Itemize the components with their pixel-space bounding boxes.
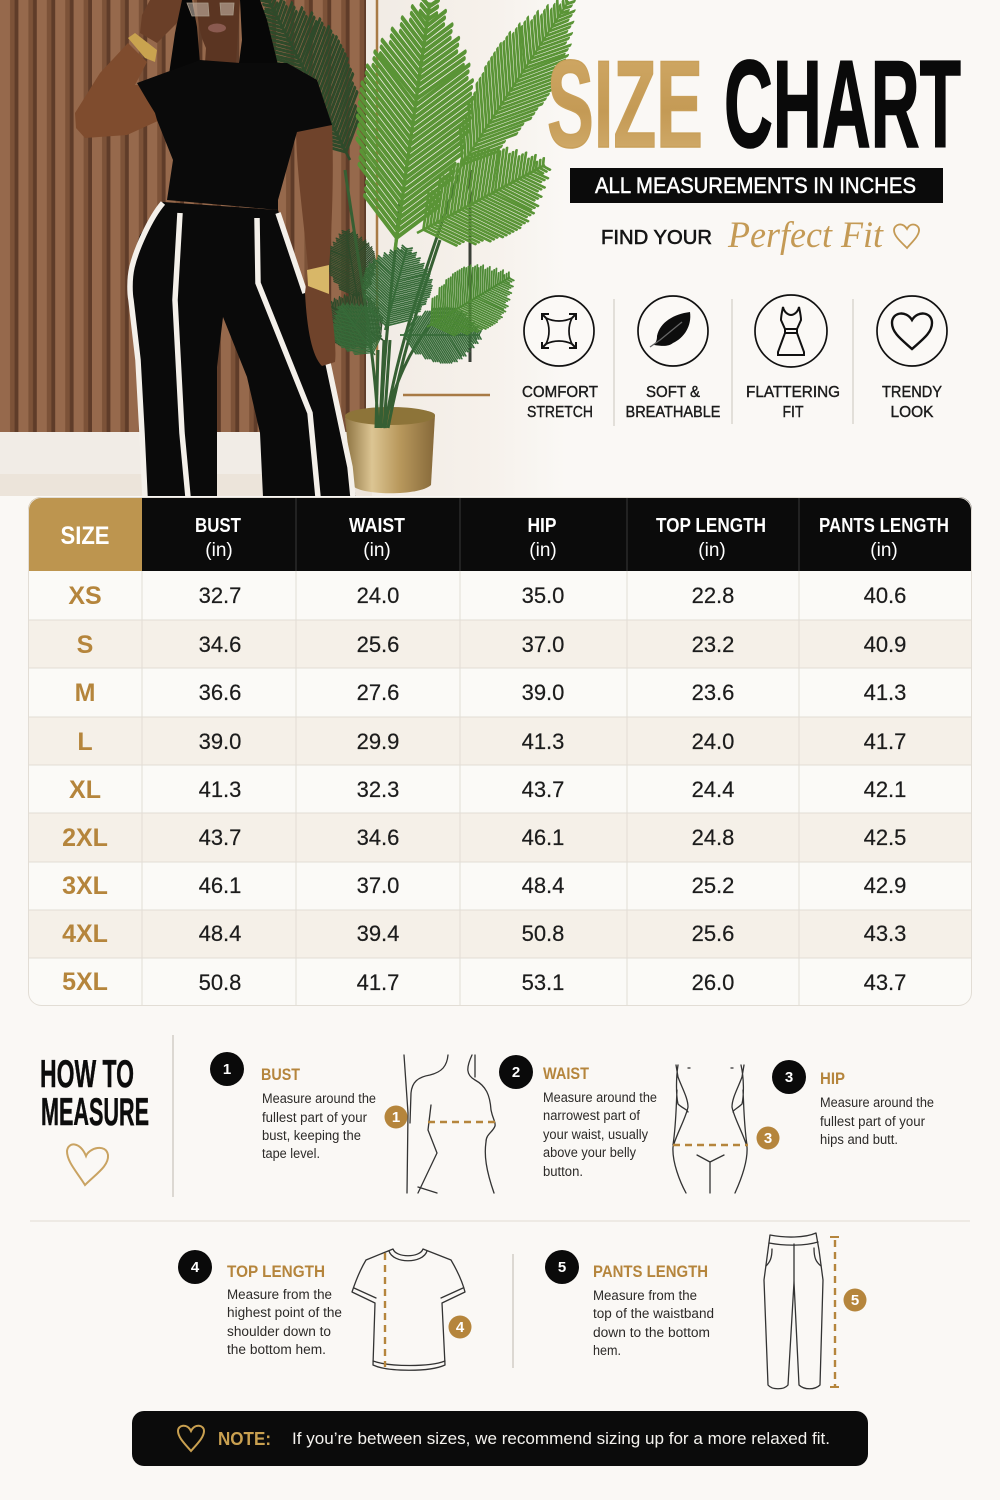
row: M: 27.6 <box>357 680 399 705</box>
dark window strip <box>468 170 472 362</box>
row: L: 41.7 <box>864 729 906 754</box>
row: 5XL: 50.8 <box>199 970 241 995</box>
row: S <box>77 635 906 653</box>
row: 5XL <box>62 972 906 990</box>
row: 3XL <box>62 876 906 894</box>
row: 2XL: 2XL <box>62 824 108 852</box>
step 1: bust <box>210 1052 495 1193</box>
row: M <box>76 684 906 701</box>
step 2: waist: Measure around the <box>543 1090 657 1105</box>
row: 4XL: 48.4 <box>199 921 241 946</box>
step 1: bust: fullest part of your <box>262 1110 367 1125</box>
icon: feather <box>638 296 708 366</box>
step 3: hip: fullest part of your <box>820 1114 925 1129</box>
row: 2XL: 24.8 <box>692 825 734 850</box>
row: 4XL: 4XL <box>62 920 108 948</box>
feature: trendy look <box>877 296 947 421</box>
bright wall and window <box>366 0 502 496</box>
table header: TOP LENGTH <box>656 515 766 537</box>
row: L: 24.0 <box>692 729 734 754</box>
row: 2XL: 43.7 <box>199 825 241 850</box>
table header: HIP <box>528 515 556 537</box>
diagram: t-shirt: 4 <box>456 1319 465 1336</box>
feature: flattering fit: FIT <box>782 404 804 421</box>
row: L <box>79 732 906 750</box>
step 1: bust: BUST <box>261 1065 301 1084</box>
row: 3XL: 46.1 <box>199 873 241 898</box>
banner: all measurements <box>570 168 943 203</box>
table header: BUST <box>195 515 241 537</box>
feature: trendy look: LOOK <box>890 404 934 421</box>
table header: (in) <box>205 540 233 561</box>
pot rim <box>345 407 435 425</box>
hair <box>170 0 278 71</box>
lower floor band <box>0 474 372 496</box>
row: 5XL: 26.0 <box>692 970 734 995</box>
step 4: top length: shoulder down to <box>227 1324 331 1339</box>
row: M: 41.3 <box>864 680 906 705</box>
neck and face <box>197 0 240 63</box>
black shirt <box>137 60 332 210</box>
row: M: 39.0 <box>522 680 564 705</box>
hero photo: model and plant <box>0 0 599 497</box>
step 1: bust: Measure around the <box>262 1091 376 1106</box>
step 1: bust: bust, keeping the <box>262 1128 361 1143</box>
mirror frame <box>377 0 490 395</box>
row: 3XL: 42.9 <box>864 873 906 898</box>
icon: small heart <box>894 224 919 248</box>
how to measure heading: HOW TO <box>40 1053 134 1096</box>
row: S: 23.2 <box>692 632 734 657</box>
step 1: bust: tape level. <box>262 1146 320 1161</box>
table header: PANTS LENGTH <box>819 515 949 537</box>
lips <box>208 24 226 32</box>
tagline: find your perfect fit: Perfect Fit <box>727 215 885 256</box>
table header: (in) <box>870 540 898 561</box>
step 5: pants length: Measure from the <box>593 1288 697 1303</box>
step 2: waist <box>499 1055 780 1193</box>
row: XS: 40.6 <box>864 583 906 608</box>
step 4: top length: the bottom hem. <box>227 1342 326 1357</box>
row: 2XL: 42.5 <box>864 825 906 850</box>
row: 4XL: 50.8 <box>522 921 564 946</box>
diagram: t-shirt <box>352 1249 472 1370</box>
row: 3XL: 37.0 <box>357 873 399 898</box>
number badge 1: 1 <box>223 1061 231 1078</box>
row: XS: XS <box>68 582 102 610</box>
row: S: 25.6 <box>357 632 399 657</box>
size header cell: SIZE <box>60 522 110 550</box>
feature: flattering fit: FLATTERING <box>746 384 840 401</box>
row: L: L <box>77 728 93 756</box>
row: 5XL: 53.1 <box>522 970 564 995</box>
step 4: top length: highest point of the <box>227 1305 342 1320</box>
step 5: pants length <box>545 1233 866 1389</box>
hand at glasses <box>140 0 186 43</box>
row: L: 39.0 <box>199 729 241 754</box>
row: 5XL: 5XL <box>62 968 108 996</box>
feature: comfort stretch: COMFORT <box>522 384 598 401</box>
number badge 3 <box>772 1060 806 1094</box>
gold cuff <box>307 265 329 294</box>
back dark fronds <box>260 0 384 349</box>
diagram: trousers <box>764 1233 866 1389</box>
raised arm <box>75 43 160 138</box>
row: XL: 43.7 <box>522 777 564 802</box>
row: XS: 24.0 <box>357 583 399 608</box>
floor <box>0 432 347 474</box>
row: M: M <box>75 679 95 707</box>
step 2: waist: your waist, usually <box>543 1127 648 1142</box>
black pants <box>128 202 356 497</box>
size header cell <box>28 497 142 571</box>
diagram: trousers: 5 <box>851 1292 859 1309</box>
note bar: NOTE: <box>218 1429 271 1449</box>
lower mid fronds <box>332 244 482 364</box>
feature icons row <box>522 295 947 421</box>
table header: (in) <box>363 540 391 561</box>
row: 2XL <box>63 828 906 846</box>
number badge 2 <box>499 1055 533 1089</box>
row: 4XL: 43.3 <box>864 921 906 946</box>
size table <box>28 497 972 1006</box>
number badge 4 <box>178 1250 212 1284</box>
step 5: pants length: top of the waistband <box>593 1306 714 1321</box>
table header: WAIST <box>349 515 405 537</box>
number badge 5 <box>545 1250 579 1284</box>
row: XS: 22.8 <box>692 583 734 608</box>
right arm <box>296 125 335 366</box>
note bar: If you’re between sizes, we recommend sizing up for a more relaxed fit. <box>292 1429 830 1448</box>
row: 3XL: 48.4 <box>522 873 564 898</box>
step 3: hip <box>772 1060 934 1147</box>
feature: trendy look: TRENDY <box>882 384 942 401</box>
row: XS: 32.7 <box>199 583 241 608</box>
row: XL: 32.3 <box>357 777 399 802</box>
striped rows <box>28 620 972 958</box>
step 5: pants length: down to the bottom <box>593 1325 710 1340</box>
step 5: pants length: hem. <box>593 1343 621 1358</box>
row: 2XL: 46.1 <box>522 825 564 850</box>
step 3: hip: hips and butt. <box>820 1132 898 1147</box>
row: 4XL <box>62 924 906 942</box>
icon: stretch arrows <box>524 296 594 366</box>
icon: heart <box>877 296 947 366</box>
row: S: 37.0 <box>522 632 564 657</box>
row: 3XL: 3XL <box>62 872 108 900</box>
row: 3XL: 25.2 <box>692 873 734 898</box>
row: XL: 42.1 <box>864 777 906 802</box>
row: 5XL: 43.7 <box>864 970 906 995</box>
row: 2XL: 34.6 <box>357 825 399 850</box>
row: 5XL: 41.7 <box>357 970 399 995</box>
row: XS: 35.0 <box>522 583 564 608</box>
title: SIZE CHART <box>547 36 961 174</box>
bright fronds <box>356 0 576 250</box>
how to measure heading: MEASURE <box>41 1091 149 1134</box>
feature: soft and breathable: SOFT & <box>646 384 700 401</box>
row: 4XL: 39.4 <box>357 921 399 946</box>
table body background <box>28 497 972 1006</box>
gold bracelet <box>128 33 157 62</box>
note bar <box>132 1411 868 1466</box>
step 3: hip: HIP <box>820 1069 845 1088</box>
tagline: find your perfect fit <box>601 215 919 256</box>
feature: soft and breathable: BREATHABLE <box>626 404 720 421</box>
step 2: waist: WAIST <box>543 1064 590 1083</box>
row: S: S <box>77 631 93 659</box>
row: XL: 41.3 <box>199 777 241 802</box>
diagram: bust side view <box>384 1055 495 1193</box>
tagline: find your perfect fit: FIND YOUR <box>601 227 712 249</box>
row: XL <box>69 780 906 798</box>
row: S: 40.9 <box>864 632 906 657</box>
row: M: 36.6 <box>199 680 241 705</box>
step 4: top length <box>178 1249 472 1370</box>
banner: all measurements: ALL MEASUREMENTS IN INCHES <box>595 173 916 198</box>
number badge 2: 2 <box>512 1064 520 1081</box>
diagram: torso front view <box>673 1065 780 1193</box>
row: XL: 24.4 <box>692 777 734 802</box>
table header <box>28 497 972 571</box>
icon: dress <box>755 295 827 367</box>
table header: (in) <box>698 540 726 561</box>
number badge 1 <box>210 1052 244 1086</box>
pants white stripes <box>130 203 353 497</box>
diagram: torso front view: 3 <box>764 1130 772 1147</box>
step 4: top length: TOP LENGTH <box>227 1262 325 1281</box>
step 2: waist: button. <box>543 1164 583 1179</box>
feature: soft and breathable <box>626 296 720 421</box>
number badge 5: 5 <box>558 1259 566 1276</box>
icon: note heart <box>178 1426 204 1451</box>
feature: flattering fit <box>746 295 840 421</box>
row: 4XL: 25.6 <box>692 921 734 946</box>
wood slat wall <box>0 0 372 432</box>
row: XS <box>68 586 906 604</box>
row: S: 34.6 <box>199 632 241 657</box>
diagram: bust side view: 1 <box>392 1109 400 1126</box>
table header: (in) <box>529 540 557 561</box>
row: L: 29.9 <box>357 729 399 754</box>
row: L: 41.3 <box>522 729 564 754</box>
glasses <box>187 3 234 16</box>
step 2: waist: narrowest part of <box>543 1108 640 1123</box>
stems <box>345 170 458 428</box>
how to measure heading <box>40 1053 149 1185</box>
step 3: hip: Measure around the <box>820 1095 934 1110</box>
SIZE: SIZE <box>547 36 703 174</box>
feature: comfort stretch <box>522 296 598 421</box>
number badge 3: 3 <box>785 1069 793 1086</box>
plant <box>260 0 576 494</box>
step 5: pants length: PANTS LENGTH <box>593 1262 708 1281</box>
step 4: top length: Measure from the <box>227 1287 332 1302</box>
feature: comfort stretch: STRETCH <box>527 404 593 421</box>
pot <box>345 410 435 493</box>
icon: gold heart <box>67 1144 108 1185</box>
row: XL: XL <box>69 776 101 804</box>
step 2: waist: above your belly <box>543 1145 636 1160</box>
number badge 4: 4 <box>191 1259 200 1276</box>
row: M: 23.6 <box>692 680 734 705</box>
